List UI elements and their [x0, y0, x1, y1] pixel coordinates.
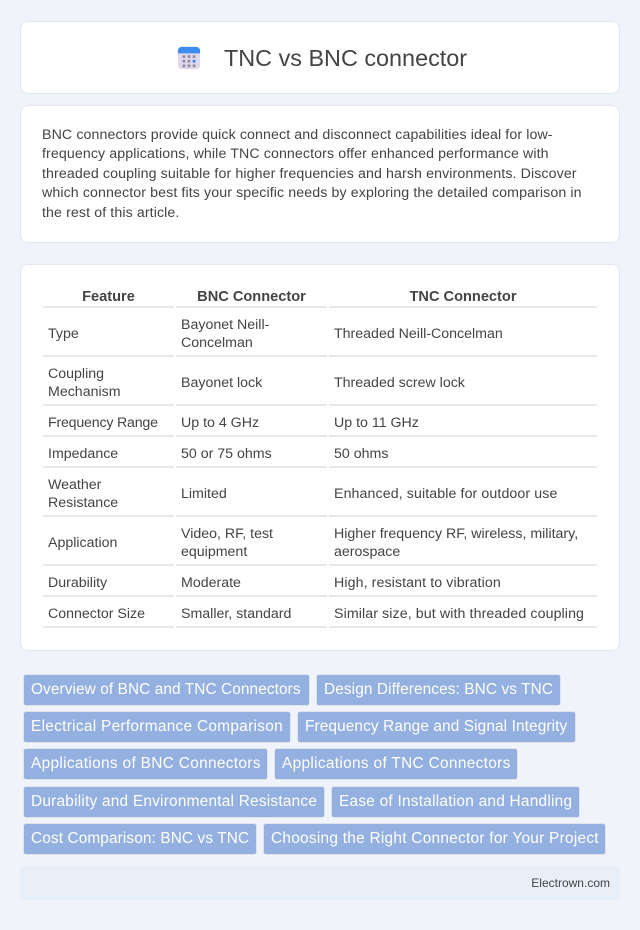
chip: design differences: [316, 674, 561, 706]
table: feature comparison: TNC Connector: [409, 289, 517, 305]
text block: introduction: which connector best fits your specific needs by exploring the detailed comparison in: [42, 185, 582, 201]
table: feature comparison: Similar size, but with threaded coupling: [334, 606, 584, 622]
table: feature comparison: Moderate: [181, 575, 241, 591]
table: feature comparison: Bayonet Neill-: [181, 317, 269, 333]
panel: topic links: [23, 674, 606, 855]
table: feature comparison: Threaded Neill-Concelman: [334, 326, 503, 342]
chip: frequency range: Frequency Range and Signal Integrity: [305, 718, 567, 735]
text block: introduction: frequency applications, while TNC connectors offer enhanced performance with: [42, 146, 549, 162]
table: feature comparison: Connector Size: [48, 606, 145, 622]
footer credit: Electrown.com: [531, 876, 610, 890]
icon: calendar: [178, 46, 200, 70]
table: feature comparison: Concelman: [181, 335, 253, 351]
table: feature comparison: Bayonet lock: [181, 375, 262, 391]
title: TNC vs BNC connector: [224, 45, 467, 71]
table: feature comparison: Coupling: [48, 366, 104, 382]
chip: choosing connector: Choosing the Right Connector for Your Project: [271, 830, 599, 847]
table: feature comparison: Up to 4 GHz: [181, 415, 259, 431]
table: feature comparison: Enhanced, suitable for outdoor use: [334, 486, 557, 502]
text block: introduction: the rest of this article.: [42, 205, 179, 221]
table: feature comparison: Threaded screw lock: [334, 375, 465, 391]
table: feature comparison: High, resistant to vibration: [334, 575, 501, 591]
panel: header: [20, 21, 620, 94]
table: feature comparison: Weather: [48, 477, 101, 493]
text block: introduction: BNC connectors provide quick connect and disconnect capabilities ideal for low-: [42, 127, 553, 143]
chip: cost comparison: Cost Comparison: BNC vs TNC: [31, 830, 249, 847]
table: feature comparison: Impedance: [48, 446, 118, 462]
text block: introduction: threaded coupling suitable for higher frequencies and harsh environments. Discover: [42, 166, 577, 182]
chip: TNC applications: Applications of TNC Connectors: [282, 755, 511, 772]
table: feature comparison: Higher frequency RF, wireless, military,: [334, 526, 578, 542]
table: feature comparison: Feature: [82, 289, 135, 305]
table: feature comparison: Resistance: [48, 495, 118, 511]
chip: electrical performance: Electrical Performance Comparison: [31, 718, 283, 735]
chip: BNC applications: [23, 748, 268, 780]
text block: introduction: [42, 127, 582, 221]
panel: introduction: [20, 105, 620, 243]
chip: overview: [23, 674, 310, 706]
chip: overview: Overview of BNC and TNC Connectors: [31, 681, 301, 698]
table: feature comparison: Frequency Range: [48, 415, 158, 431]
table: feature comparison: Mechanism: [48, 384, 121, 400]
table: feature comparison: Video, RF, test: [181, 526, 273, 542]
chip: TNC applications: [274, 748, 518, 780]
table: feature comparison: 50 or 75 ohms: [181, 446, 272, 462]
chip: ease of installation: Ease of Installation and Handling: [339, 793, 572, 810]
table: feature comparison: Limited: [181, 486, 227, 502]
table: feature comparison: [43, 289, 597, 628]
chip: durability: Durability and Environmental Resistance: [31, 793, 317, 810]
table: feature comparison: equipment: [181, 544, 247, 560]
chip: frequency range: [297, 711, 576, 743]
table: feature comparison: BNC Connector: [197, 289, 306, 305]
table: feature comparison: Smaller, standard: [181, 606, 291, 622]
chip: durability: [23, 786, 325, 818]
table: feature comparison: Durability: [48, 575, 107, 591]
table: feature comparison: aerospace: [334, 544, 400, 560]
table: feature comparison: 50 ohms: [334, 446, 388, 462]
chip: cost comparison: [23, 823, 257, 855]
chip: BNC applications: Applications of BNC Connectors: [31, 755, 261, 772]
panel: comparison table: [20, 264, 620, 651]
chip: design differences: Design Differences: BNC vs TNC: [324, 681, 553, 698]
footer: [20, 866, 620, 900]
chip: electrical performance: [23, 711, 291, 743]
chip: ease of installation: [331, 786, 580, 818]
table: feature comparison: Up to 11 GHz: [334, 415, 419, 431]
chip: choosing connector: [263, 823, 606, 855]
table: feature comparison: Type: [48, 326, 79, 342]
table: feature comparison: Application: [48, 535, 117, 551]
